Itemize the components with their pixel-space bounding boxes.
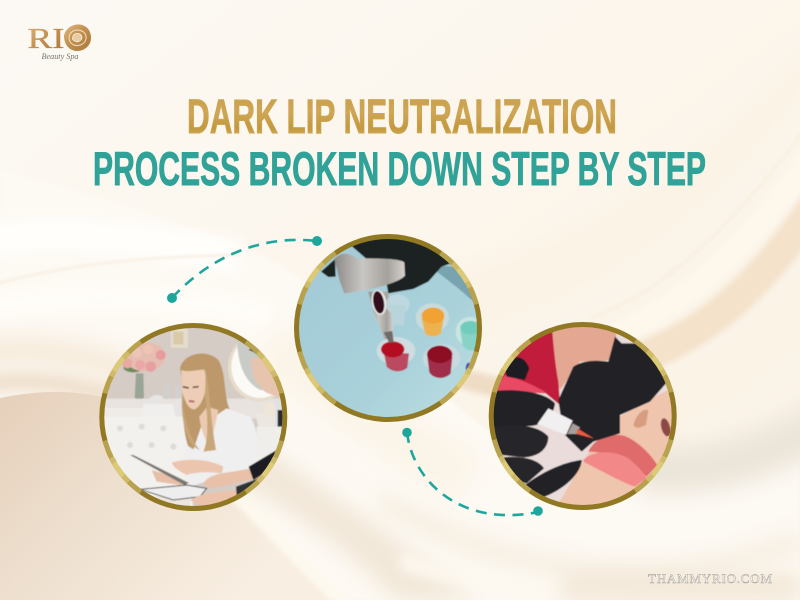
logo: RIO Beauty Spa (28, 24, 91, 61)
woman: hair front (182, 368, 216, 452)
face (560, 390, 672, 505)
burgundy pigment cup (423, 344, 460, 378)
assistant arms (190, 450, 277, 508)
watermark website: THAMMYRIO.COM (648, 571, 772, 586)
tattoo machine body (334, 254, 405, 293)
peach fold lower left (0, 392, 338, 600)
upper right folds (430, 40, 800, 330)
sofa (104, 417, 282, 506)
logo wordmark: RI (28, 24, 64, 55)
counter and device (100, 385, 290, 427)
arrow: step 1 to step 2 (167, 236, 322, 303)
assistant face and hair (248, 348, 282, 428)
lips (583, 435, 657, 487)
title (93, 91, 706, 195)
logo tagline: Beauty Spa (42, 52, 78, 61)
photo circle 1: consultation (100, 323, 291, 513)
woman: hair back (180, 353, 230, 450)
black glove (352, 239, 450, 294)
icon: gold rose (64, 24, 91, 51)
photo circle 2: pigment cups (295, 232, 485, 425)
blue pigment tip (465, 362, 470, 371)
gold ring (491, 324, 674, 508)
red pigment cup with needle (377, 331, 415, 371)
teal pigment cup (456, 316, 477, 351)
picture frame on wall (171, 328, 188, 348)
woman: face (181, 370, 206, 409)
arm skin (552, 323, 617, 390)
arrow: step 2 to step 3 (402, 428, 543, 516)
needle cartridge (368, 289, 393, 342)
gold ring (102, 326, 285, 508)
left hand black glove fingers (487, 357, 582, 498)
tablet and hands (130, 455, 223, 485)
white tattoo pen and red needle (537, 408, 594, 439)
woman: shirt (185, 408, 258, 486)
pink sleeve (493, 375, 547, 393)
orange pigment cup (416, 303, 449, 336)
clipboard (140, 485, 207, 500)
gold ring (296, 236, 480, 420)
flowers in vase (122, 342, 166, 400)
right hand black glove (558, 337, 666, 452)
photo circle 3: lip procedure (487, 323, 683, 513)
lit mirror (228, 340, 276, 402)
clear empty cup (386, 294, 410, 325)
red uniform (500, 332, 560, 404)
